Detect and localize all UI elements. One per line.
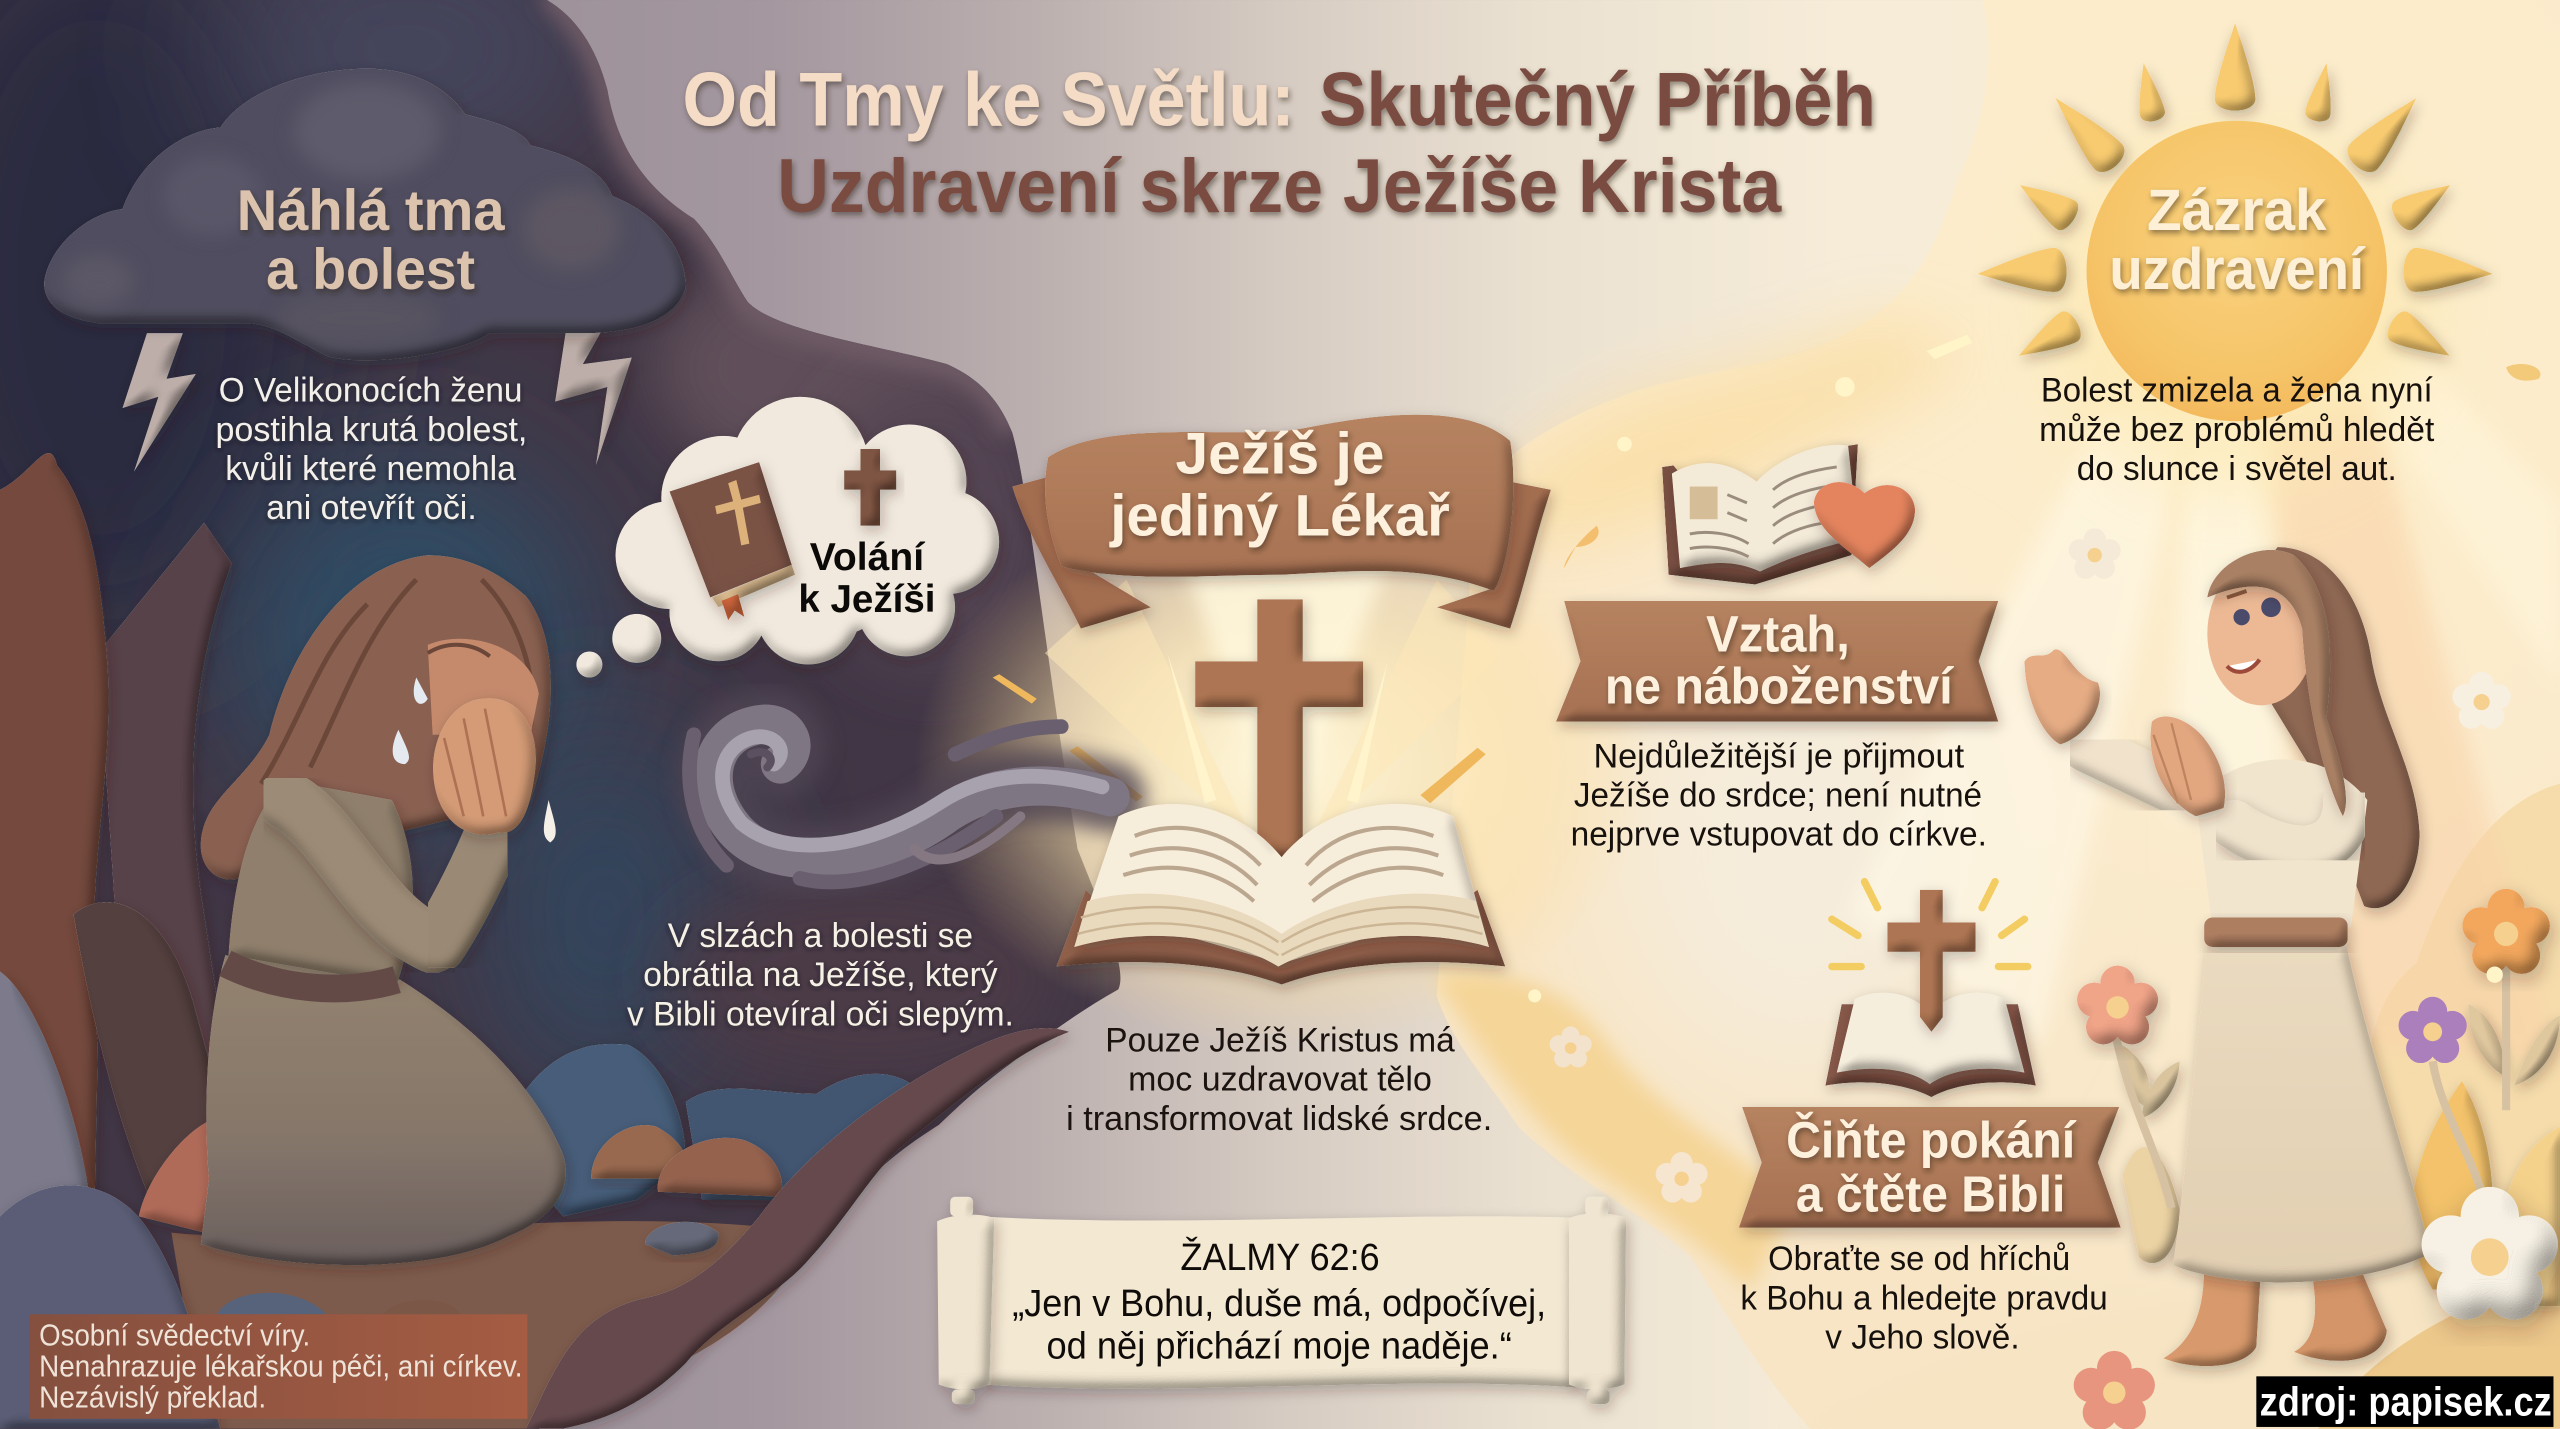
psalm scroll [937, 1197, 1626, 1404]
text: sudden pain: kvůli které nemohla [225, 450, 517, 488]
text: miracle [2039, 372, 2435, 488]
scroll text [1012, 1236, 1546, 1367]
sun [1976, 23, 2494, 490]
banner heading: jediný Lékař [1109, 484, 1450, 549]
woman in pain [139, 555, 566, 1265]
banner heading: Ježíš je [1176, 421, 1384, 486]
title: Skutečný Příběh [1319, 58, 1876, 143]
text: miracle: může bez problémů hledět [2039, 411, 2435, 449]
icon: small cross [844, 449, 896, 526]
light sparkles [1528, 335, 2540, 1002]
text: repent: k Bohu a hledejte pravdu [1740, 1279, 2108, 1317]
thought cloud [576, 397, 999, 678]
edge strand [526, 1028, 1069, 1429]
disclaimer box: Nenahrazuje lékařskou péči, ani církev. [39, 1350, 522, 1383]
cloud heading [237, 179, 506, 302]
dark cave region [0, 0, 1176, 1429]
text: tears: obrátila na Ježíše, který [643, 956, 998, 994]
text: relationship: Nejdůležitější je přijmout [1593, 737, 1965, 775]
sun heading [2109, 178, 2366, 302]
thought text [798, 536, 936, 621]
central cross [1195, 599, 1363, 857]
banner: repent: Čiňte pokání [1786, 1112, 2077, 1169]
text: sudden pain [216, 372, 527, 527]
plants behind healed woman [2122, 1004, 2560, 1306]
text: relationship [1571, 737, 1987, 854]
book and cross icon [1825, 882, 2036, 1097]
sun heading: uzdravení [2109, 237, 2366, 302]
thought text: k Ježíši [798, 578, 936, 621]
banner: relationship: ne náboženství [1605, 658, 1954, 715]
disclaimer box: Nezávislý překlad. [39, 1381, 266, 1414]
rocks left [0, 453, 245, 1257]
book and heart icon [1662, 444, 1915, 584]
banner: repent [1739, 1107, 2121, 1228]
scroll text: ŽALMY 62:6 [1180, 1236, 1380, 1279]
storm cloud [44, 69, 686, 472]
main banner [1012, 415, 1551, 629]
text: tears: v Bibli otevíral oči slepým. [627, 995, 1014, 1033]
banner: relationship: Vztah, [1706, 605, 1850, 662]
title: Uzdravení skrze Ježíše Krista [777, 144, 1782, 229]
swirl of darkness [690, 724, 1110, 882]
cloud heading: Náhlá tma [237, 179, 506, 243]
text: tears [627, 917, 1014, 1033]
scroll text: „Jen v Bohu, duše má, odpočívej, [1012, 1282, 1546, 1325]
text: only Jesus [1066, 1021, 1492, 1138]
scroll text: od něj přichází moje naděje.“ [1047, 1324, 1512, 1367]
central glow [914, 490, 1649, 1045]
healed woman [2024, 547, 2431, 1366]
text: sudden pain: ani otevřít oči. [266, 489, 477, 527]
text: only Jesus: i transformovat lidské srdce. [1066, 1100, 1492, 1138]
open bible [1056, 804, 1505, 984]
text: only Jesus: moc uzdravovat tělo [1128, 1061, 1432, 1099]
title: Od Tmy ke Světlu: [682, 58, 1295, 143]
text: sudden pain: O Velikonocích ženu [219, 372, 522, 410]
sun heading: Zázrak [2147, 178, 2327, 243]
text: only Jesus: Pouze Ježíš Kristus má [1105, 1021, 1456, 1059]
sunbeams [1845, 351, 2560, 1061]
text: repent [1740, 1240, 2108, 1357]
thought text: Volání [810, 536, 925, 579]
disclaimer box: Osobní svědectví víry. [39, 1319, 310, 1352]
ground and stones [0, 1044, 934, 1429]
title [682, 58, 1876, 229]
icon: bible [669, 462, 795, 620]
text: miracle: do slunce i světel aut. [2077, 450, 2397, 488]
text: miracle: Bolest zmizela a žena nyní [2041, 372, 2433, 410]
banner: repent: a čtěte Bibli [1796, 1165, 2065, 1222]
banner: relationship [1556, 601, 1998, 722]
text: repent: v Jeho slově. [1825, 1319, 2020, 1357]
text: tears: V slzách a bolesti se [668, 917, 973, 955]
text: relationship: nejprve vstupovat do církve. [1571, 816, 1987, 854]
text: repent: Obraťte se od hříchů [1768, 1240, 2070, 1278]
disclaimer box [29, 1314, 527, 1419]
banner heading [1109, 421, 1450, 549]
cloud heading: a bolest [266, 238, 475, 302]
text: sudden pain: postihla krutá bolest, [216, 411, 527, 449]
flowers [1549, 528, 2558, 1429]
text: relationship: Ježíše do srdce; není nutné [1574, 777, 1982, 815]
